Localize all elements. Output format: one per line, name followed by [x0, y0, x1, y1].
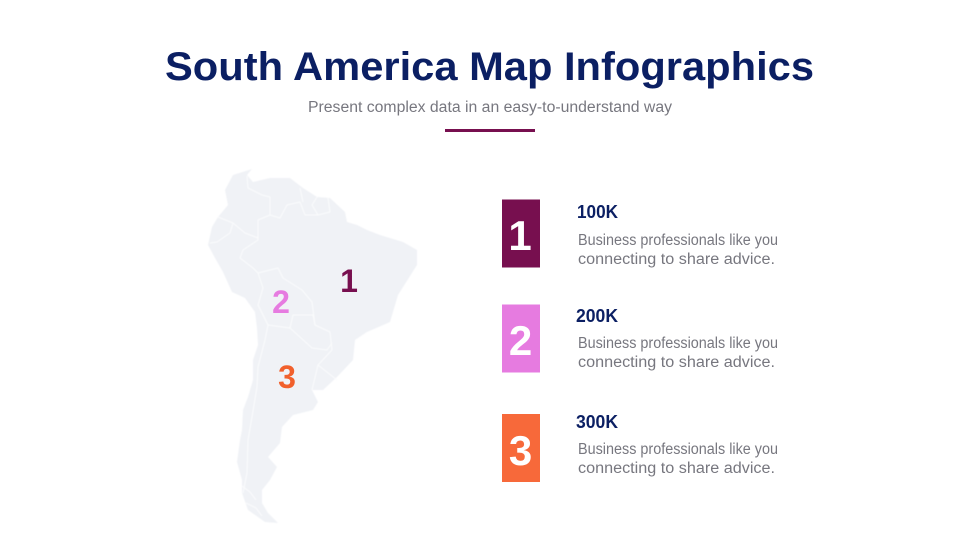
badge 1: 1: [508, 212, 532, 259]
item 2 description: Business professionals like you: [578, 335, 778, 352]
item 1 description: connecting to share advice.: [578, 251, 775, 268]
badge 2: 2: [509, 317, 532, 364]
item 2: [502, 304, 778, 372]
title: South America Map Infographics: [165, 45, 814, 89]
item 1 description: [578, 232, 778, 268]
item 2 description: [578, 335, 778, 371]
map label 1: 1: [340, 263, 358, 299]
item 3: [502, 412, 778, 482]
badge 3: 3: [509, 427, 532, 474]
map: South America: [208, 169, 417, 523]
item 1 value: 100K: [577, 202, 618, 222]
map label 3: 3: [278, 359, 296, 395]
item 3 description: connecting to share advice.: [578, 460, 775, 477]
item 3 description: [578, 441, 778, 477]
item 3 value: 300K: [576, 412, 618, 432]
badge 3: [502, 414, 540, 482]
item 1: [502, 200, 778, 268]
subtitle: Present complex data in an easy-to-understand way: [308, 99, 672, 116]
badge 2: [502, 304, 540, 372]
item 1 description: Business professionals like you: [578, 232, 778, 249]
title underline: [445, 129, 535, 132]
map label 2: 2: [272, 284, 290, 320]
item 3 description: Business professionals like you: [578, 441, 778, 458]
item 2 description: connecting to share advice.: [578, 354, 775, 371]
badge 1: [502, 200, 540, 268]
item 2 value: 200K: [576, 306, 618, 326]
